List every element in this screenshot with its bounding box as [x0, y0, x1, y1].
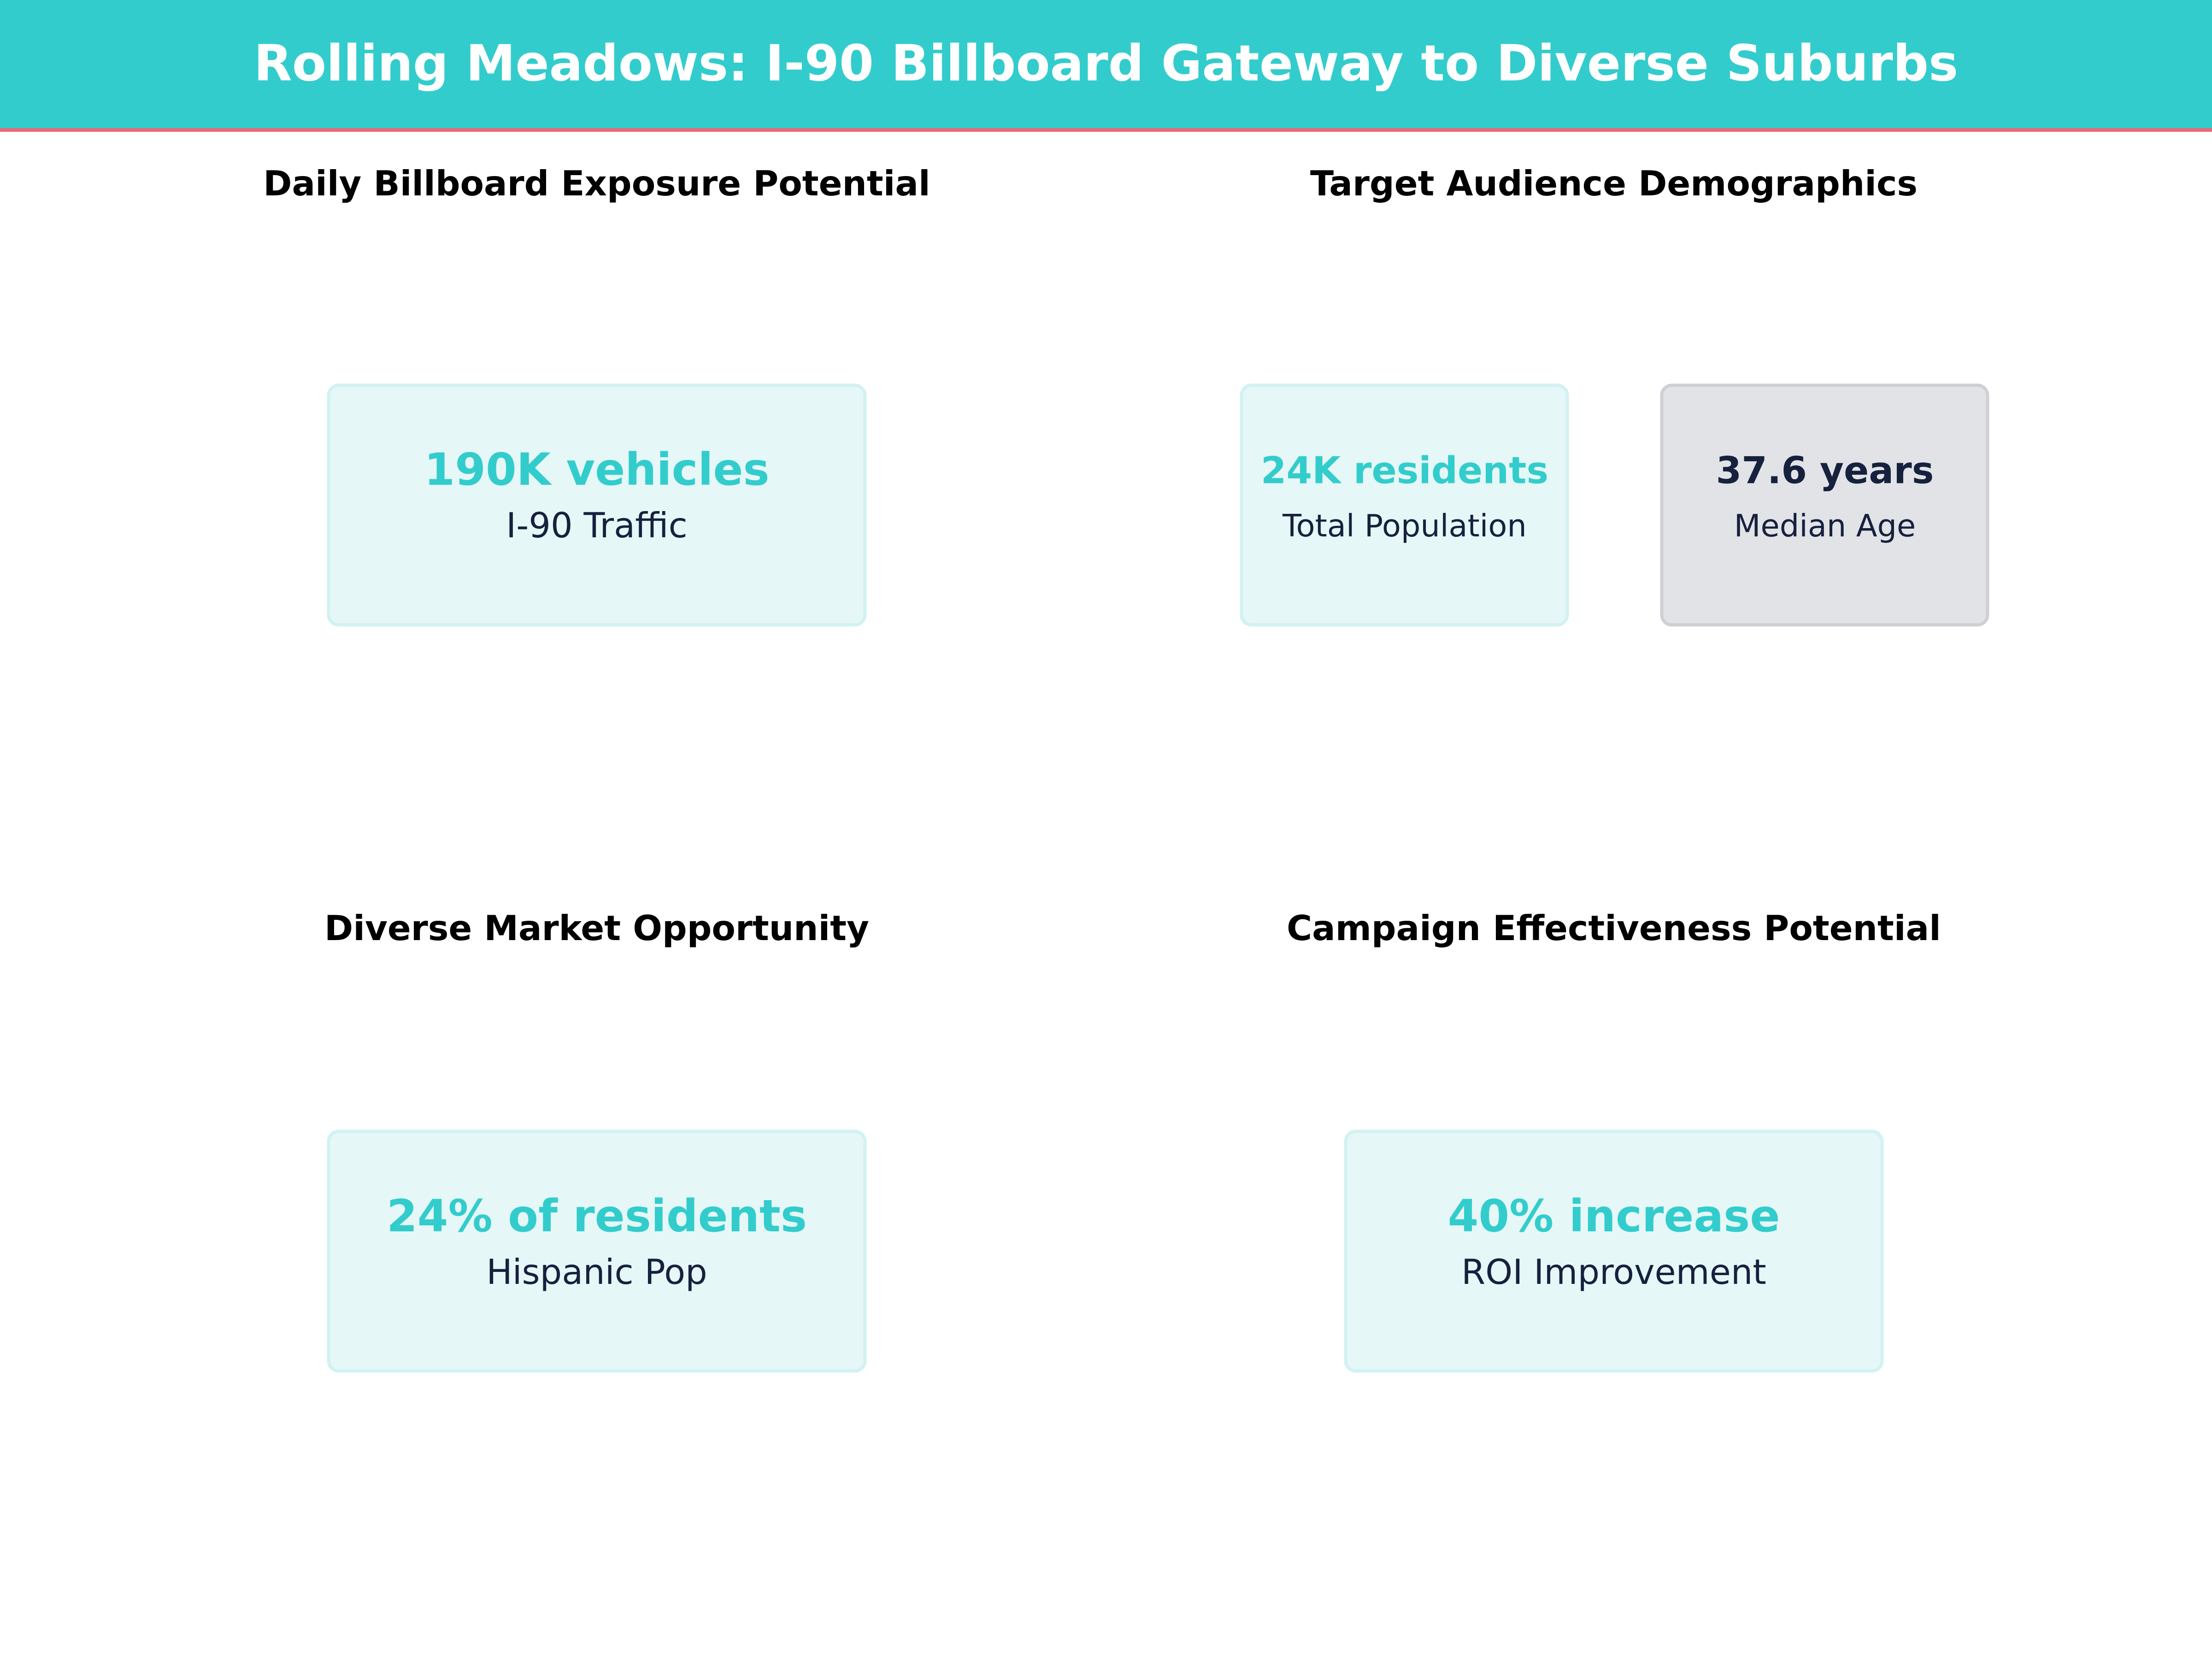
stat card: hispanic population: [329, 1131, 865, 1371]
panel heading: demographics: Target Audience Demographics: [1310, 163, 1918, 204]
panel: campaign effectiveness: [1287, 908, 1941, 1371]
stat card: total population: 24K residents: [1261, 449, 1548, 492]
stat card: hispanic population: Hispanic Pop: [486, 1252, 707, 1292]
stat card: median age: Median Age: [1734, 508, 1916, 544]
panel: target audience demographics: [1241, 163, 1988, 625]
stat card: median age: [1662, 385, 1988, 625]
stat card: median age: 37.6 years: [1716, 449, 1934, 492]
panel heading: exposure: Daily Billboard Exposure Potential: [263, 163, 930, 204]
panel: daily billboard exposure: [263, 163, 930, 625]
stat card: hispanic population: 24% of residents: [387, 1190, 807, 1242]
stat card: ROI improvement: [1346, 1131, 1882, 1371]
panel: diverse market opportunity: [324, 908, 869, 1371]
panel heading: campaign effectiveness: Campaign Effectiveness Potential: [1287, 908, 1941, 948]
stat card: total population: Total Population: [1282, 508, 1527, 544]
panel heading: diverse market: Diverse Market Opportunity: [324, 908, 869, 948]
stat card: ROI improvement: 40% increase: [1448, 1190, 1780, 1242]
stat card: ROI improvement: ROI Improvement: [1461, 1252, 1766, 1292]
header banner: [0, 0, 2212, 132]
title: Rolling Meadows: I-90 Billboard Gateway to Diverse Suburbs: [254, 35, 1958, 92]
stat card: total population: [1241, 385, 1567, 625]
stat card: I-90 traffic: I-90 Traffic: [506, 505, 688, 546]
stat card: I-90 traffic: [329, 385, 865, 625]
stat card: I-90 traffic: 190K vehicles: [424, 444, 770, 495]
